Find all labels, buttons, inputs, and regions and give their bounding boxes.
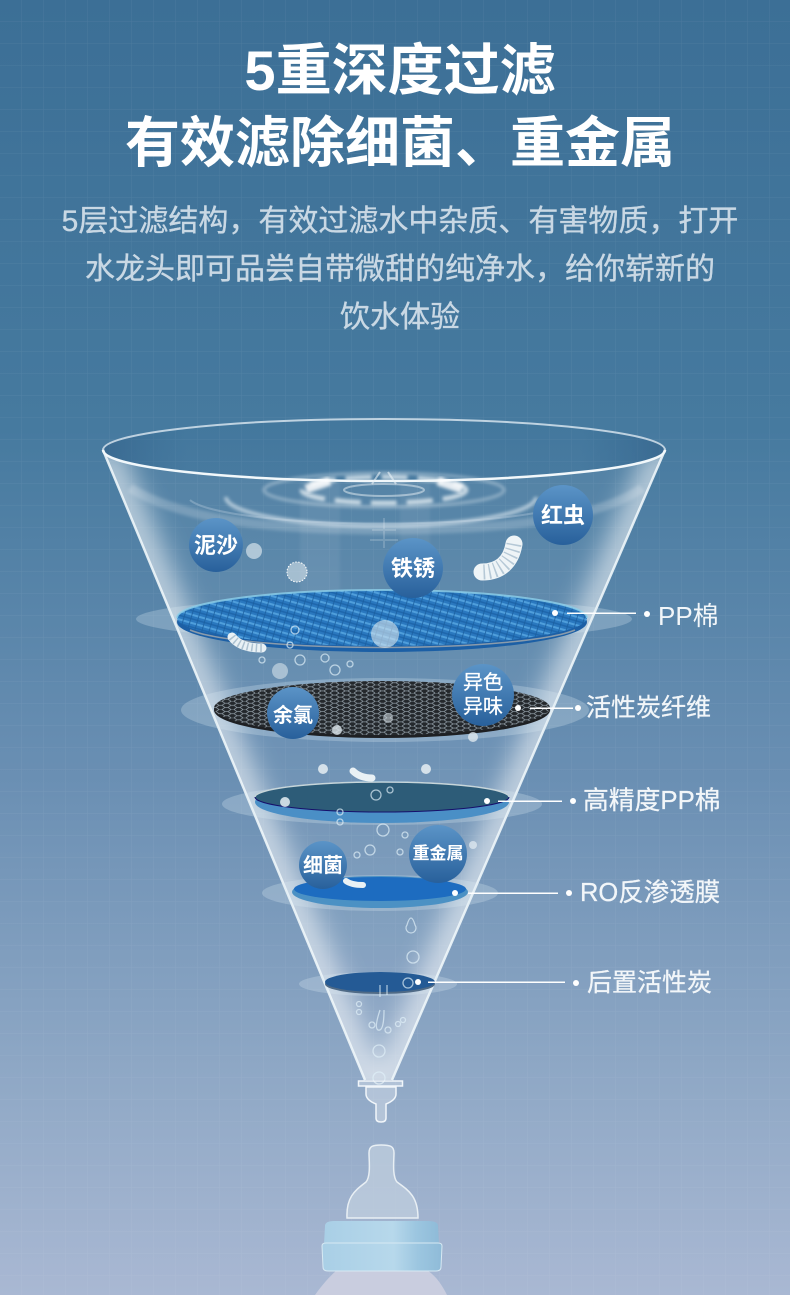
- disc halo layer: [136, 597, 632, 996]
- water bubbles: [259, 626, 419, 1084]
- callout: 活性炭纤维: [515, 694, 711, 722]
- funnel glass: [103, 418, 665, 1080]
- label bubble: 异色异味: 异色: [463, 671, 503, 694]
- label bubble: 重金属: [409, 825, 467, 883]
- label bubble: 余氯: [267, 687, 319, 739]
- title: 5重深度过滤: [244, 39, 556, 102]
- label bubble: 细菌: [299, 841, 347, 889]
- filter 5: post activated carbon disc: [325, 972, 435, 994]
- worms and particles: [232, 543, 514, 885]
- label bubble: 红虫: 红虫: [541, 503, 585, 528]
- label bubble: 铁锈: [383, 538, 443, 598]
- callout: RO反渗透膜: [452, 879, 720, 907]
- callout: RO反渗透膜: RO反渗透膜: [580, 879, 720, 907]
- label bubble: 余氯: 余氯: [273, 703, 313, 727]
- description text: 水龙头即可品尝自带微甜的纯净水，给你崭新的: [85, 253, 715, 286]
- description text: 饮水体验: [340, 301, 460, 334]
- label bubble: 细菌: 细菌: [303, 854, 343, 877]
- filter 2: activated carbon fibre disc: [214, 681, 550, 738]
- description text: [62, 205, 738, 334]
- label bubble: 红虫: [533, 485, 593, 545]
- callout: 后置活性炭: [415, 969, 712, 997]
- title: 有效滤除细菌、重金属: [125, 112, 675, 174]
- callout: 高精度PP棉: [484, 786, 721, 815]
- label bubble: 铁锈: 铁锈: [391, 556, 435, 581]
- label bubble: 异色异味: 异味: [463, 695, 503, 718]
- callout: PP棉: [552, 601, 719, 631]
- water ripples: [190, 472, 575, 548]
- filter 1: PP cotton disc: [177, 590, 587, 652]
- title: [125, 39, 675, 174]
- callout: 高精度PP棉: 高精度PP棉: [583, 786, 721, 815]
- description text: 5层过滤结构，有效过滤水中杂质、有害物质，打开: [62, 205, 738, 238]
- filter 4: RO membrane disc: [292, 876, 468, 908]
- baby bottle: [315, 1145, 447, 1295]
- filter 3: high precision PP disc: [255, 781, 509, 823]
- callout: 活性炭纤维: 活性炭纤维: [586, 694, 711, 722]
- small teat under funnel: [358, 1081, 402, 1122]
- label bubble: 泥沙: 泥沙: [194, 533, 238, 558]
- callout: PP棉: PP棉: [658, 601, 719, 631]
- callout: 后置活性炭: 后置活性炭: [587, 969, 712, 997]
- label bubble: 泥沙: [189, 518, 243, 572]
- label bubble: 重金属: 重金属: [412, 843, 464, 863]
- label bubble: 异色异味: [452, 664, 514, 726]
